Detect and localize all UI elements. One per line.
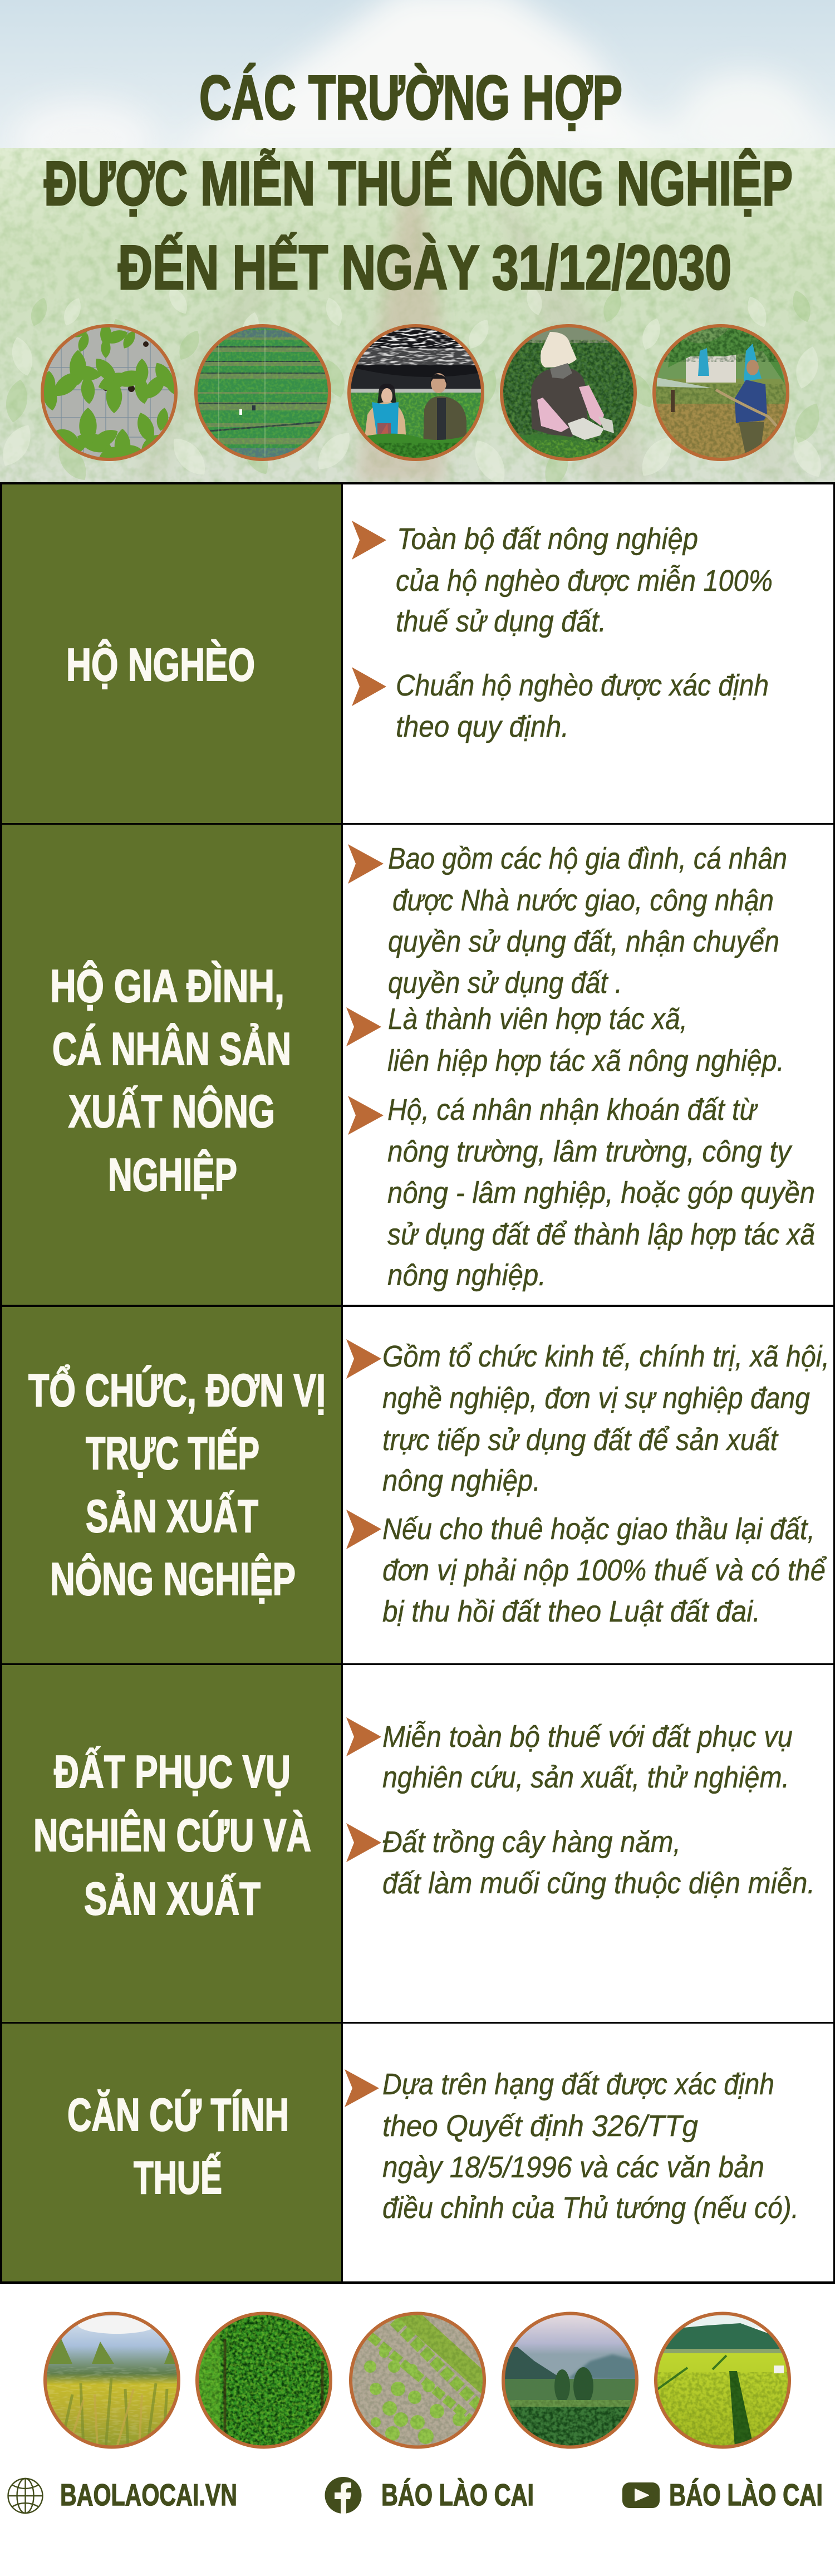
row 3: Tổ chức, đơn vị: SẢN XUẤT [86,1490,258,1542]
row 4: Đất phục vụ nghiên cứu: ĐẤT PHỤC VỤ [54,1745,291,1798]
row 2: Hộ gia đình, cá nhân: nông trường, lâm trường, công ty [387,1135,793,1168]
photo: man watering a garden [651,323,790,465]
photo: seedlings on plastic mulch [39,322,185,464]
footer: website [8,2477,237,2513]
title: CÁC TRƯỜNG HỢP [199,63,622,133]
row 4: Đất phục vụ nghiên cứu [2,1665,833,2022]
row 3: Tổ chức, đơn vị: trực tiếp sử dụng đất để sản xuất [382,1423,779,1457]
row 2: Hộ gia đình, cá nhân: HỘ GIA ĐÌNH, [50,960,284,1012]
icon: facebook [325,2477,362,2514]
footer: website: BAOLAOCAI.VN [60,2477,237,2512]
photo: aerial dark green crop [195,2311,334,2450]
photo: two people in a shaded nursery [345,323,490,462]
row 2: Hộ gia đình, cá nhân: quyền sử dụng đất . [388,966,622,1000]
title [44,63,793,302]
row 4: Đất phục vụ nghiên cứu: NGHIÊN CỨU VÀ [33,1809,311,1861]
photo: aerial seedling rows [192,323,331,462]
row 1: Hộ nghèo: Toàn bộ đất nông nghiệp [397,522,698,556]
row 2: Hộ gia đình, cá nhân: Bao gồm các hộ gia đình, cá nhân [388,842,787,875]
row 4: Đất phục vụ nghiên cứu: Đất trồng cây hàng năm, [382,1825,681,1859]
row 2: Hộ gia đình, cá nhân: Là thành viên hợp tác xã, [388,1002,687,1036]
footer: facebook: BÁO LÀO CAI [381,2477,534,2512]
photo: woman picking tea-like plants [498,323,640,465]
row 2: Hộ gia đình, cá nhân: Hộ, cá nhân nhận khoán đất từ [387,1093,758,1127]
row 3: Tổ chức, đơn vị: TRỰC TIẾP [86,1427,259,1479]
row 2: Hộ gia đình, cá nhân: XUẤT NÔNG [68,1085,275,1137]
row 2: Hộ gia đình, cá nhân: được Nhà nước giao, công nhận [392,884,774,917]
row 2: Hộ gia đình, cá nhân: NGHIỆP [108,1149,237,1201]
photo: terraced yellow-green rice fields [654,2311,793,2451]
row 3: Tổ chức, đơn vị: nông nghiệp. [382,1464,541,1497]
row 4: Đất phục vụ nghiên cứu: Miễn toàn bộ thuế với đất phục vụ [382,1720,793,1754]
row 5: Căn cứ tính thuế [2,2024,833,2281]
row 2: Hộ gia đình, cá nhân [2,825,833,1305]
row 5: Căn cứ tính thuế: ngày 18/5/1996 và các văn bản [382,2151,764,2184]
row 3: Tổ chức, đơn vị: TỔ CHỨC, ĐƠN VỊ [28,1364,326,1416]
row 2: Hộ gia đình, cá nhân: CÁ NHÂN SẢN [52,1022,291,1075]
row 5: Căn cứ tính thuế: theo Quyết định 326/TTg [382,2109,698,2143]
row 4: Đất phục vụ nghiên cứu: nghiên cứu, sản xuất, thử nghiệm. [382,1761,789,1794]
row 1: Hộ nghèo: theo quy định. [396,710,569,743]
row 2: Hộ gia đình, cá nhân: quyền sử dụng đất, nhận chuyển [388,925,779,958]
icon: youtube [622,2482,660,2508]
row 2: Hộ gia đình, cá nhân: nông nghiệp. [387,1258,546,1292]
row 3: Tổ chức, đơn vị: NÔNG NGHIỆP [50,1553,296,1605]
row 1: Hộ nghèo [2,484,833,823]
row 5: Căn cứ tính thuế: CĂN CỨ TÍNH [67,2089,289,2141]
header background: sky and crop field [0,0,835,492]
icon: globe [8,2479,42,2513]
row 3: Tổ chức, đơn vị [2,1307,833,1663]
row 1: Hộ nghèo: thuế sử dụng đất. [396,605,606,638]
footer: facebook [325,2477,534,2514]
table frame [0,482,835,2284]
row 4: Đất phục vụ nghiên cứu: SẢN XUẤT [84,1872,261,1924]
row 5: Căn cứ tính thuế: Dựa trên hạng đất được xác định [382,2068,774,2101]
row 3: Tổ chức, đơn vị: bị thu hồi đất theo Luật đất đai. [382,1595,760,1628]
row 1: Hộ nghèo: của hộ nghèo được miễn 100% [396,564,773,598]
row 2: Hộ gia đình, cá nhân: liên hiệp hợp tác xã nông nghiệp. [387,1044,784,1078]
photo: lettuce rows on soil [350,2311,490,2450]
photo: ripening rice field [42,2311,182,2450]
row 5: Căn cứ tính thuế: THUẾ [134,2152,222,2203]
row 1: Hộ nghèo: Chuẩn hộ nghèo được xác định [396,669,769,702]
row 1: Hộ nghèo: HỘ NGHÈO [66,639,255,690]
photo: misty forest and cornfield [501,2311,640,2453]
